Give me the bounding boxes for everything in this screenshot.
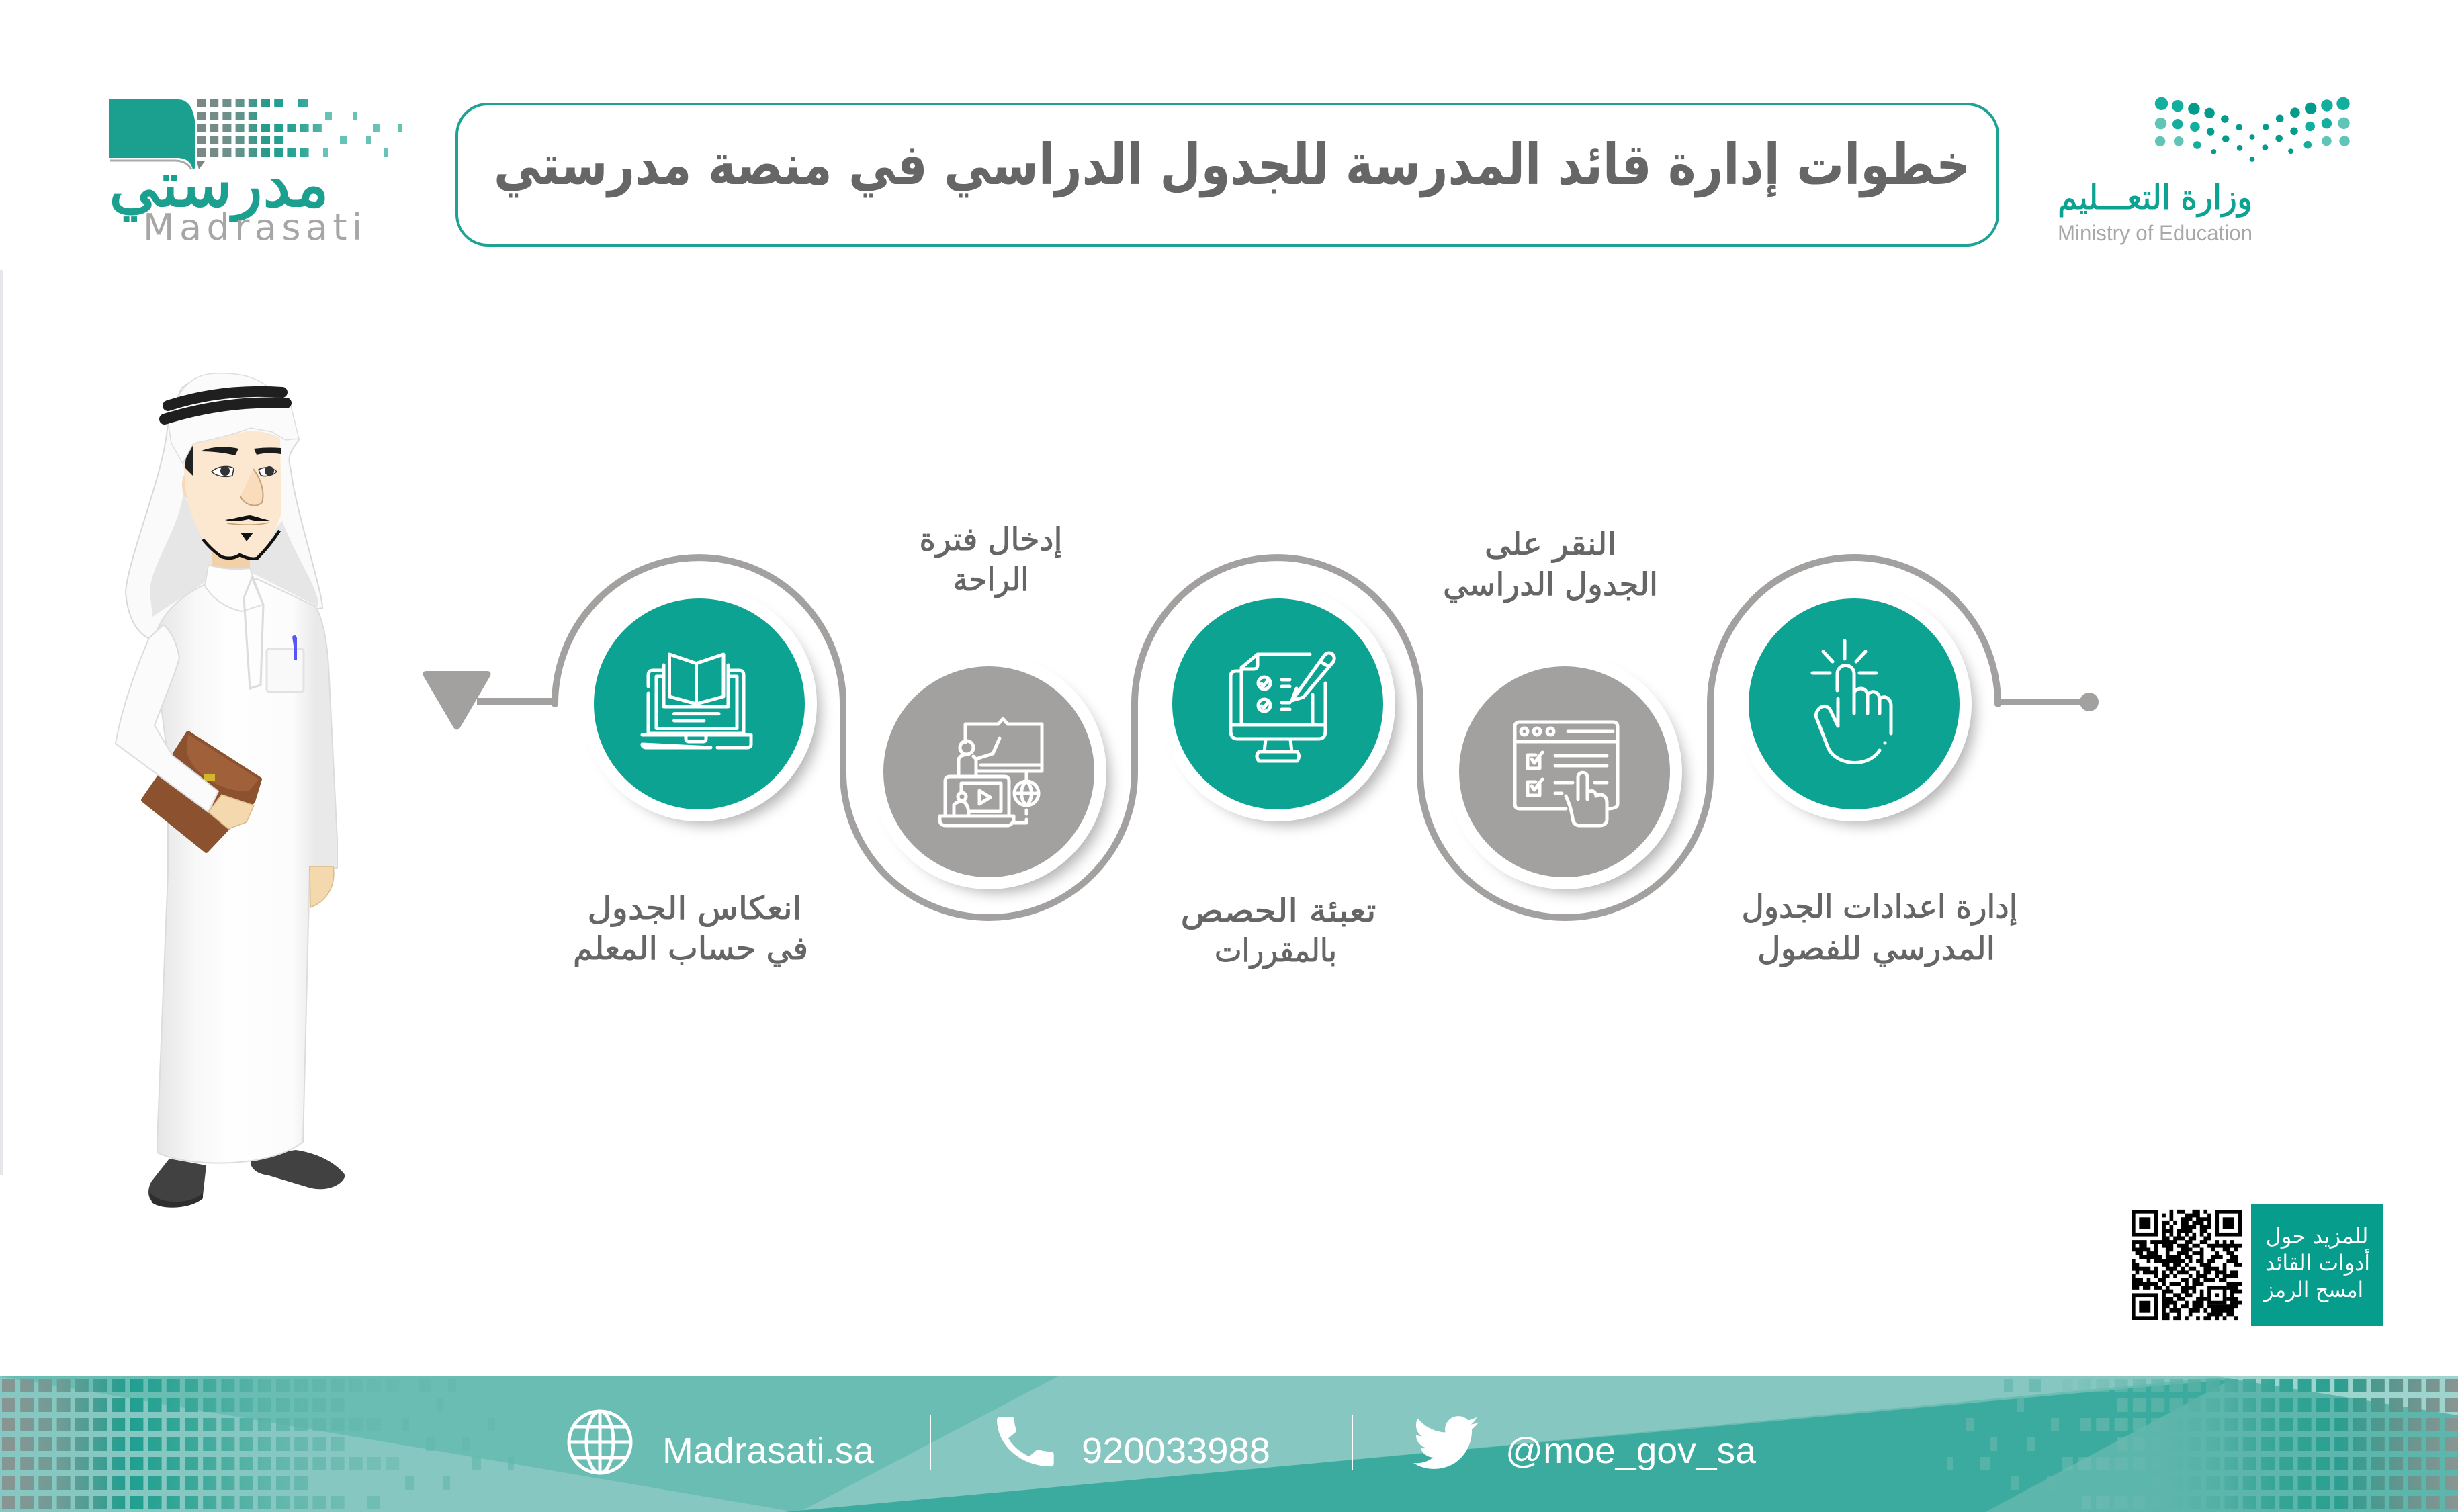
- serpentine path line: [423, 558, 2099, 918]
- ministry arabic name: وزارة التعـــليم: [2058, 178, 2252, 218]
- eyes: [212, 466, 277, 476]
- gray circle: [1459, 666, 1670, 877]
- thobe body: [153, 579, 337, 1163]
- icon: pixel squares: [197, 103, 402, 152]
- QR finder patterns: [2134, 1212, 2240, 1318]
- Ministry of Education logo: [2058, 97, 2350, 245]
- step 1: school schedule settings: [1737, 586, 2018, 967]
- step 3: fill lessons with courses: [1160, 586, 1399, 969]
- left hand: [208, 795, 254, 829]
- divider: [930, 1415, 931, 1470]
- step 4 label: إدخال فترة: [919, 521, 1063, 558]
- teal circle: [1749, 598, 1960, 809]
- QR caption text: للمزيد حول: [2265, 1223, 2369, 1249]
- step 5 label: في حساب المعلم: [573, 930, 808, 967]
- pen: [292, 635, 297, 660]
- character: man in thobe: [116, 373, 345, 1208]
- nose: [240, 469, 263, 506]
- phone number: 920033988: [1082, 1431, 1270, 1471]
- icon: teacher with board and laptop: [940, 719, 1042, 826]
- QR code: [2132, 1212, 2242, 1318]
- ministry english name: Ministry of Education: [2058, 221, 2252, 245]
- white ring: [582, 586, 817, 821]
- gray circle: [883, 666, 1094, 877]
- step 3 label: [1181, 893, 1376, 969]
- footer pixels right: [1947, 1386, 2458, 1503]
- icon: globe: [569, 1411, 631, 1473]
- circle shadow: [887, 670, 1110, 893]
- right hand: [310, 866, 334, 907]
- shoes: [148, 1150, 345, 1208]
- teal circle: [594, 598, 805, 809]
- agal headband: [165, 392, 286, 419]
- icon: book: [109, 99, 205, 169]
- step 2 label: الجدول الدراسي: [1443, 566, 1658, 603]
- pocket: [267, 649, 304, 692]
- step 2 label: [1443, 526, 1658, 603]
- step 2: click on timetable: [1443, 526, 1685, 893]
- collar: [205, 565, 263, 611]
- path start dot: [2080, 693, 2099, 711]
- footer band: [0, 1376, 2458, 1512]
- icon: twitter bird: [1413, 1416, 1479, 1469]
- Madrasati logo: [109, 99, 402, 249]
- ghutra back: [126, 375, 322, 639]
- twitter handle: @moe_gov_sa: [1505, 1431, 1757, 1471]
- placket: [244, 578, 263, 688]
- title box: [457, 104, 1998, 245]
- circle shadow: [597, 602, 820, 825]
- divider: [1352, 1415, 1353, 1470]
- hair: [185, 443, 193, 476]
- face: [183, 431, 281, 558]
- step 4: enter break period: [871, 521, 1110, 893]
- white ring: [1737, 586, 1972, 821]
- icon: open book on laptop: [642, 654, 751, 748]
- teal circle: [1172, 598, 1383, 809]
- website text: Madrasati.sa: [662, 1431, 875, 1471]
- step 5 label: انعكاس الجدول: [587, 890, 802, 927]
- step 5 label: [573, 890, 808, 967]
- circle shadow: [1752, 602, 1975, 825]
- icon: phone: [997, 1417, 1054, 1466]
- path end arrow: [423, 671, 490, 729]
- title text: خطوات إدارة قائد المدرسة للجدول الدراسي في منصة مدرستي: [494, 132, 1970, 198]
- circle shadow: [1176, 602, 1399, 825]
- step 1 label: إدارة اعدادات الجدول: [1741, 889, 2018, 926]
- icon: browser checklist with hand: [1515, 722, 1618, 826]
- briefcase: [143, 733, 260, 851]
- white ring: [1447, 654, 1682, 889]
- step 3 label: بالمقررات: [1215, 932, 1337, 969]
- ghutra front: [168, 373, 299, 463]
- step 2 label: النقر على: [1485, 526, 1616, 563]
- icon: monitor with form and pencil: [1231, 653, 1334, 761]
- ear: [182, 472, 194, 498]
- left arm: [116, 625, 218, 812]
- step 1 label: [1741, 889, 2018, 967]
- neck: [212, 547, 250, 571]
- white ring: [871, 654, 1106, 889]
- icon: dots emblem: [2155, 97, 2350, 162]
- QR caption text: أدوات القائد: [2265, 1249, 2370, 1276]
- moustache and goatee: [225, 515, 270, 541]
- step 1 label: المدرسي للفصول: [1757, 930, 1995, 967]
- step 3 label: تعبئة الحصص: [1181, 893, 1376, 930]
- circle shadow: [1462, 670, 1685, 893]
- QR caption box: [2251, 1204, 2383, 1326]
- beard line: [203, 531, 279, 559]
- icon: tapping hand: [1812, 641, 1891, 762]
- step 5: schedule reflected in teacher account: [573, 586, 820, 967]
- footer pixels left: [2, 1386, 514, 1503]
- QR caption text: [2263, 1223, 2370, 1302]
- logo arabic name: مدرستي: [109, 148, 329, 222]
- logo latin name: Madrasati: [143, 206, 362, 249]
- step 4 label: الراحة: [953, 562, 1029, 598]
- white ring: [1160, 586, 1395, 821]
- eyebrows: [200, 447, 281, 455]
- QR caption text: امسح الرمز: [2263, 1277, 2363, 1302]
- ghutra inner shadow: [150, 494, 318, 617]
- step 4 label: [919, 521, 1063, 598]
